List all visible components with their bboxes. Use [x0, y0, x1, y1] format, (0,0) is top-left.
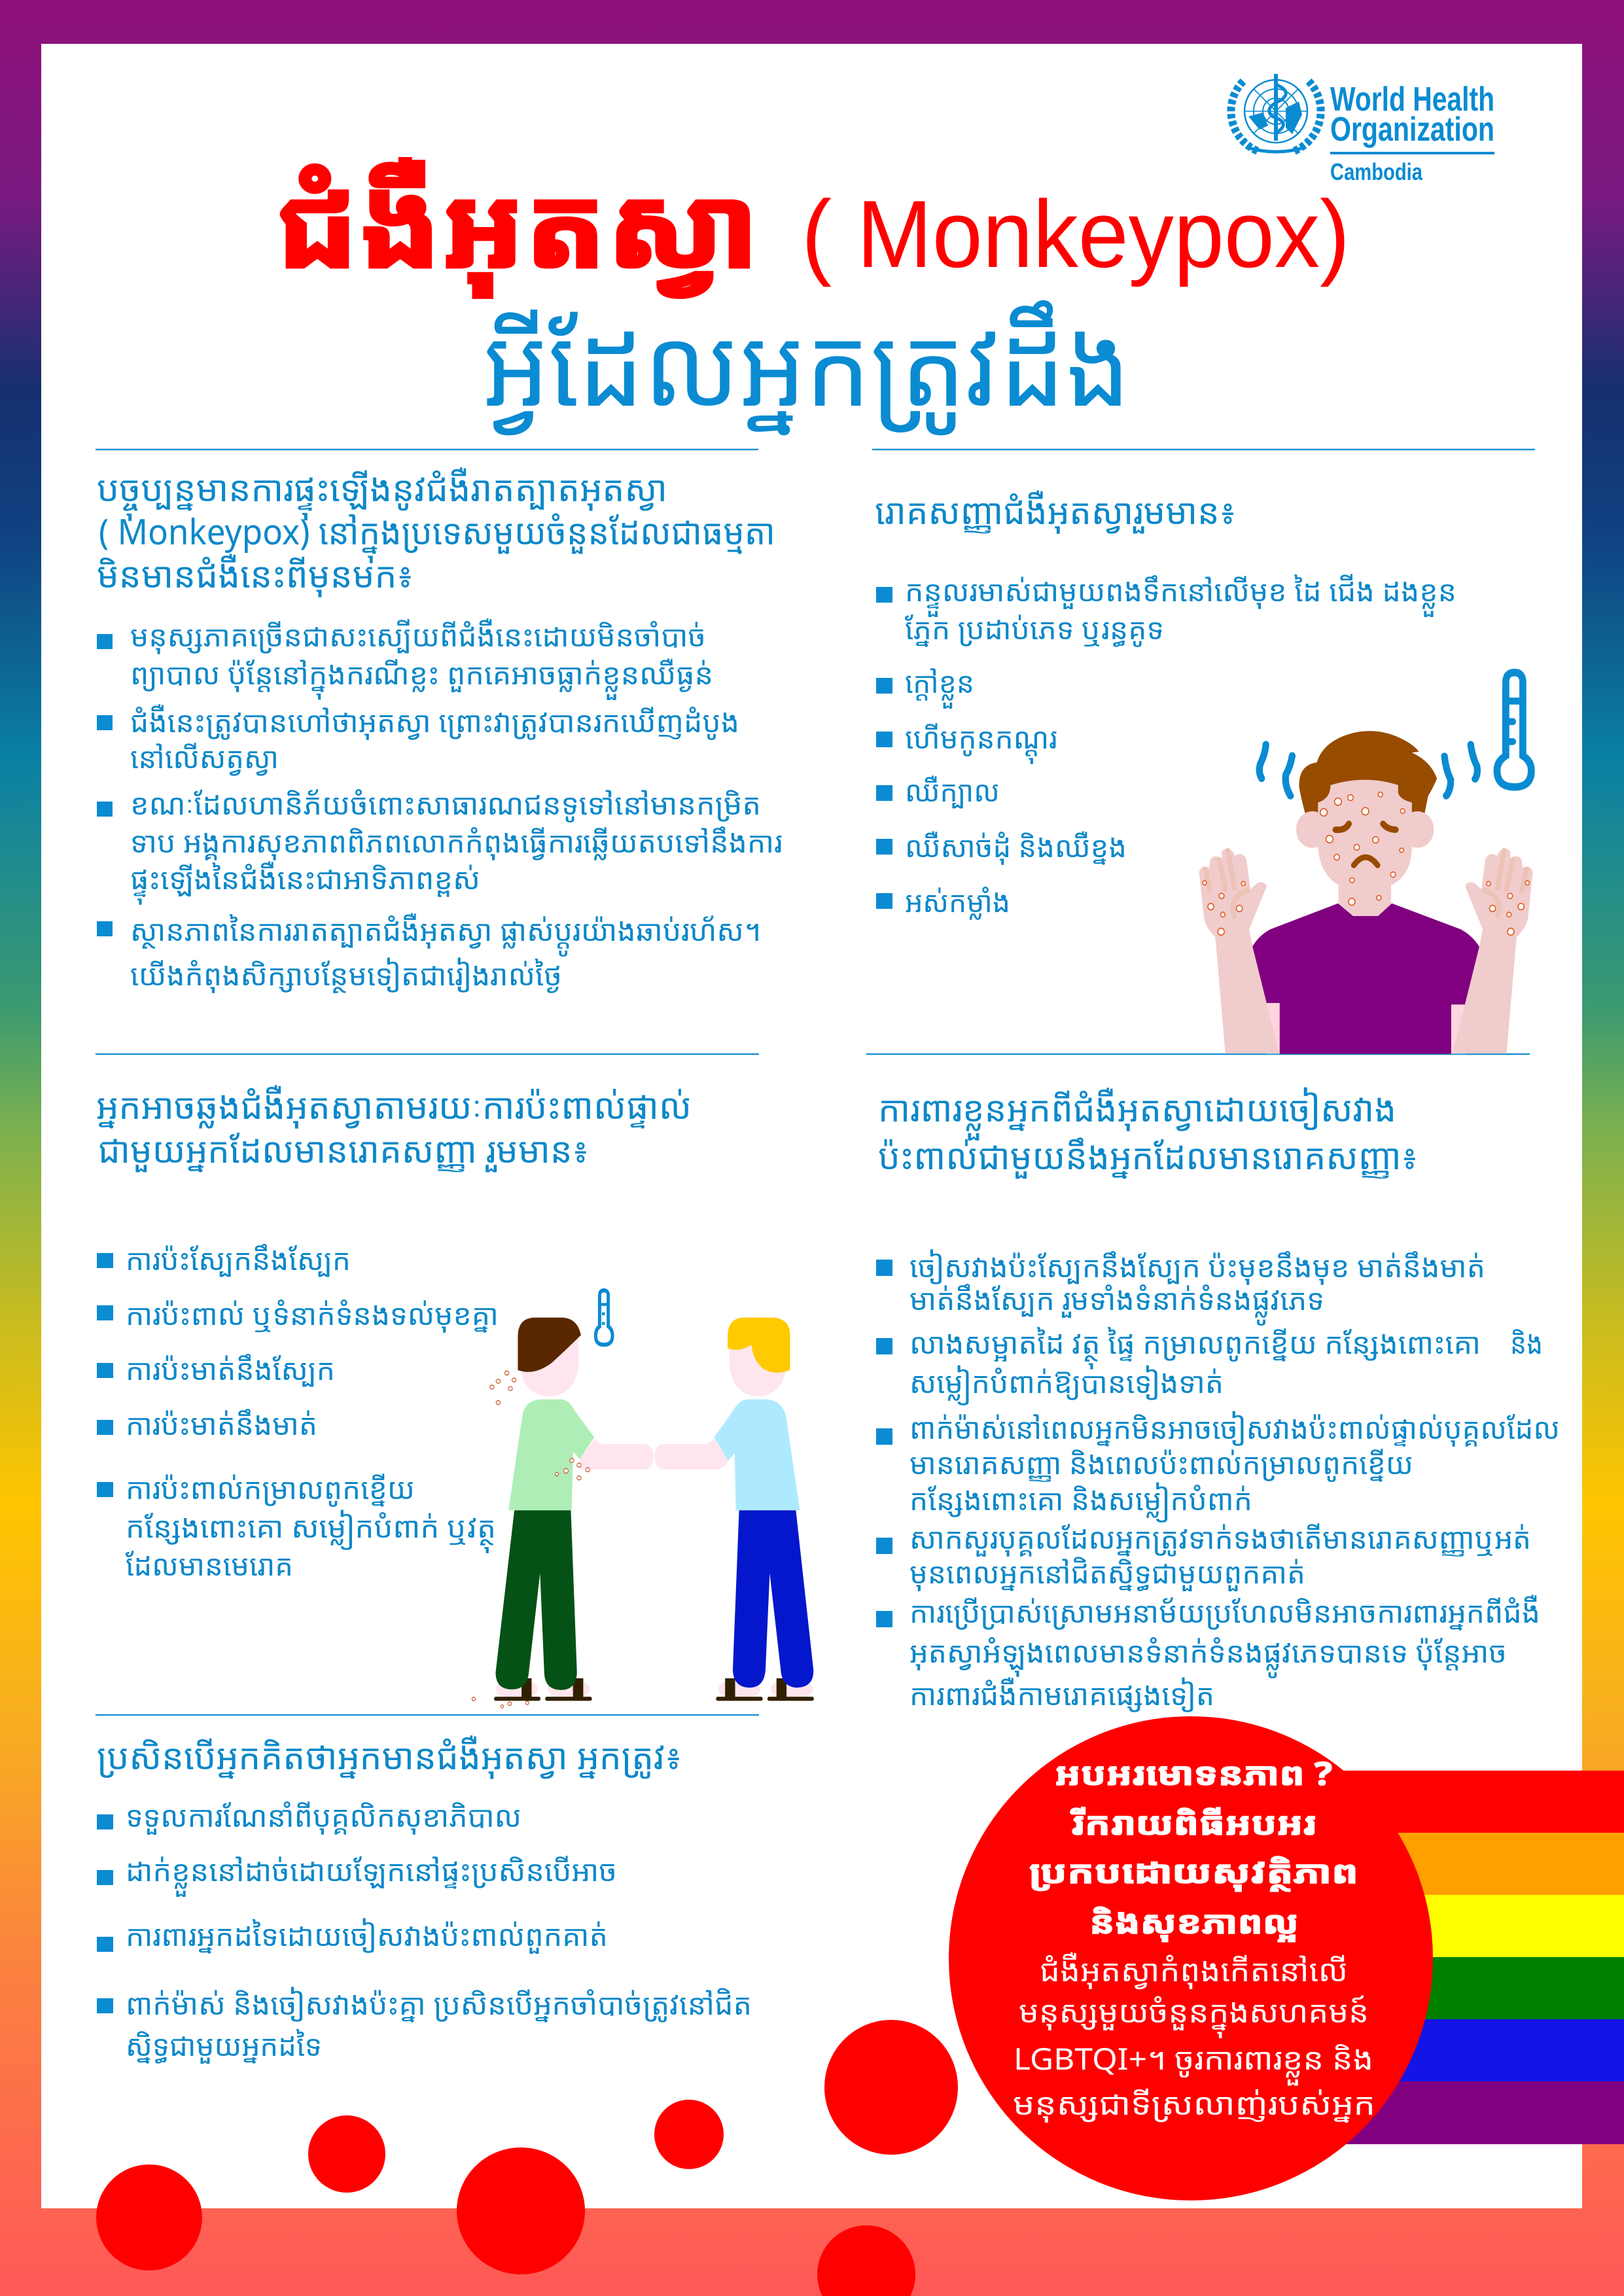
bullet: avoid skin contact: មាត់នឹងស្បែក រួមទាំងទំនាក់ទំនងផ្លូវភេទ — [909, 1279, 1324, 1326]
bullet: fever: ក្តៅខ្លួន — [905, 662, 974, 709]
bullet: ask about symptoms: មុនពេលអ្នកនៅជិតស្និទ្ធជាមួយពួកគាត់ — [909, 1553, 1305, 1592]
bullet: situation changing: យើងកំពុងសិក្សាបន្ថែមទៀតជារៀងរាល់ថ្ងៃ — [130, 955, 562, 994]
panel: symptoms — [875, 486, 1456, 921]
illustration: two people shaking hands — [472, 1290, 814, 1708]
logo wordmark: World Health — [1330, 80, 1494, 118]
panel: how it spreads — [96, 1081, 692, 1584]
person: infected — [494, 1318, 654, 1701]
rainbow flag — [1243, 1771, 1624, 2144]
bullet: avoid skin contact — [876, 1246, 1485, 1326]
callout: pride message: រីករាយពិធីអបអរ — [1070, 1802, 1316, 1845]
bullet: ask about symptoms: សាកសួរបុគ្គលដែលអ្នកត្រូវទាក់ទងថាតើមានរោគសញ្ញាឬអត់ — [909, 1518, 1531, 1557]
bullet: condoms — [876, 1592, 1540, 1714]
title: ( Monkeypox) — [802, 181, 1350, 287]
bullet: wear a mask: ពាក់ម៉ាស់ និងចៀសវាងប៉ះគ្នា ប្រសិនបើអ្នកចាំបាច់ត្រូវនៅជិត — [126, 1984, 752, 2023]
bullet: why the name — [97, 701, 739, 777]
bullet: contaminated objects: កន្សែងពោះគោ សម្លៀកបំពាក់ ឬវត្ថុ — [126, 1507, 496, 1553]
bullet: situation changing — [97, 910, 761, 994]
panel: what is happening — [97, 463, 783, 994]
callout: pride message: LGBTQI+។ ចូរការពារខ្លួន និង — [1014, 2038, 1373, 2086]
callout: pride message: មនុស្សជាទីស្រលាញ់របស់អ្នក — [1013, 2083, 1375, 2124]
bullet: fatigue: អស់កម្លាំង — [905, 881, 1010, 921]
callout: pride message: និងសុខភាពល្អ — [1089, 1901, 1299, 1943]
bullet: get advice: ទទួលការណែនាំពីបុគ្គលិកសុខាភិបាល — [126, 1796, 521, 1835]
heading — [96, 1081, 692, 1173]
callout: pride message — [949, 1716, 1433, 2200]
bullet: headache: ឈឺក្បាល — [905, 771, 1000, 810]
bullet: wear a mask: កន្សែងពោះគោ និងសម្លៀកបំពាក់ — [909, 1479, 1252, 1523]
bullet: public risk — [97, 784, 783, 905]
heading: រោគសញ្ញាជំងឺអុតស្វារួមមាន៖ — [875, 486, 1236, 535]
icon: WHO emblem — [1231, 74, 1321, 152]
logo wordmark — [1330, 80, 1494, 185]
bullet: most recover: មនុស្សភាគច្រើនជាសះស្បើយពីជំងឺនេះដោយមិនចាំបាច់ — [130, 616, 706, 655]
person: healthy — [654, 1318, 814, 1701]
bullet: clean regularly: លាងសម្អាតដៃ វត្ថុ ផ្ទៃ កម្រាលពូកខ្នើយ កន្សែងពោះគោ — [909, 1323, 1481, 1369]
callout: pride message: អបអរមោទនភាព ? — [1055, 1752, 1332, 1795]
bullet: ask about symptoms — [876, 1518, 1531, 1592]
bullet: most recover: ព្យាបាល ប៉ុន្តែនៅក្នុងករណីខ្លះ ពួកគេអាចធ្លាក់ខ្លួនឈឺធ្ងន់ — [130, 654, 713, 700]
heading: ប្រសិនបើអ្នកគិតថាអ្នកមានជំងឺអុតស្វា អ្នកត្រូវ៖ — [97, 1731, 682, 1780]
bullet: condoms: ការពារជំងឺកាមរោគផ្សេងទៀត — [909, 1674, 1214, 1714]
bullet: wear a mask: មានរោគសញ្ញា និងពេលប៉ះពាល់កម្រាលពូកខ្នើយ — [909, 1443, 1413, 1483]
bullet: muscle and back ache: ឈឺសាច់ដុំ និងឈឺខ្នង — [905, 826, 1127, 866]
heading: ការពារខ្លួនអ្នកពីជំងឺអុតស្វាដោយចៀសវាង — [878, 1084, 1396, 1140]
heading: ( Monkeypox) នៅក្នុងប្រទេសមួយចំនួនដែលជាធម្មតា — [99, 506, 775, 564]
logo wordmark: Organization — [1330, 111, 1494, 149]
heading: អ្នកអាចឆ្លងជំងឺអុតស្វាតាមរយៈការប៉ះពាល់ផ្ទាល់ — [96, 1081, 692, 1129]
callout: pride message: ប្រកបដោយសុវត្ថិភាព — [1029, 1850, 1358, 1893]
heading: ជាមួយអ្នកដែលមានរោគសញ្ញា រួមមាន៖ — [98, 1125, 589, 1173]
panel: how to protect yourself — [876, 1084, 1560, 1714]
heading: បច្ចុប្បន្នមានការផ្ទុះឡើងនូវជំងឺរាតត្បាតអុតស្វា — [97, 463, 667, 521]
bullet: most recover — [97, 616, 713, 700]
callout: pride message: មនុស្សមួយចំនួនក្នុងសហគមន៍ — [1019, 1991, 1369, 2038]
heading: ប៉ះពាល់ជាមួយនឹងអ្នកដែលមានរោគសញ្ញា៖ — [878, 1131, 1418, 1180]
bullet: clean regularly — [876, 1323, 1543, 1405]
bullet: why the name: នៅលើសត្វស្វា — [130, 737, 279, 777]
bullet: wear a mask — [97, 1984, 752, 2064]
bullet: wear a mask: ពាក់ម៉ាស់នៅពេលអ្នកមិនអាចចៀសវាងប៉ះពាល់ផ្ទាល់បុគ្គលដែល — [909, 1408, 1560, 1447]
bullet: public risk: ខណៈដែលហានិភ័យចំពោះសាធារណជនទូទៅនៅមានកម្រិត — [130, 784, 761, 823]
bullet: contaminated objects: ការប៉ះពាល់កម្រាលពូកខ្នើយ — [126, 1468, 415, 1508]
bullet: avoid skin contact: ចៀសវាងប៉ះស្បែកនឹងស្បែក ប៉ះមុខនឹងមុខ មាត់នឹងមាត់ — [909, 1246, 1485, 1286]
bullet: rash: ភ្នែក ប្រដាប់ភេទ ឬរន្ធគូទ — [905, 609, 1164, 648]
heading: មិនមានជំងឺនេះពីមុនមក៖ — [97, 550, 414, 598]
bullet: clean regularly: សម្លៀកបំពាក់ឱ្យបានទៀងទាត់ — [909, 1362, 1224, 1405]
bullet: rash: កន្ទួលរមាស់ជាមួយពងទឹកនៅលើមុខ ដៃ ជើង ដងខ្លួន — [905, 571, 1456, 617]
bullet: situation changing: ស្ថានភាពនៃការរាតត្បាតជំងឺអុតស្វា ផ្លាស់ប្តូរយ៉ាងឆាប់រហ័ស។ — [130, 910, 761, 957]
bullet: condoms: អុតស្វាអំឡុងពេលមានទំនាក់ទំនងផ្លូវភេទបានទេ ប៉ុន្តែអាច — [909, 1632, 1507, 1678]
bullet: contaminated objects: ដែលមានមេរោគ — [126, 1545, 293, 1584]
bullet: public risk: ផ្ទុះឡើងនៃជំងឺនេះជាអាទិភាពខ្ពស់ — [130, 858, 480, 905]
title: អ្វីដែលអ្នកត្រូវដឹង — [483, 289, 1131, 438]
heading — [878, 1084, 1418, 1180]
heading — [97, 463, 775, 598]
bullet: skin to skin: ការប៉ះស្បែកនឹងស្បែក — [126, 1239, 351, 1279]
logo: World Health Organization Cambodia — [1231, 74, 1494, 185]
bullet: why the name: ជំងឺនេះត្រូវបានហៅថាអុតស្វា ព្រោះវាត្រូវបានរកឃើញដំបូង — [130, 701, 739, 741]
title — [275, 147, 1350, 438]
bullet: condoms: ការប្រើប្រាស់ស្រោមអនាម័យប្រហែលមិនអាចការពារអ្នកពីជំងឺ — [909, 1592, 1540, 1631]
illustration: person with rash and fever — [1199, 673, 1533, 1054]
bullet: mouth to skin: ការប៉ះមាត់នឹងស្បែក — [126, 1349, 335, 1388]
title: ជំងឺអុតស្វា — [275, 147, 759, 300]
bullet: wear a mask — [876, 1408, 1560, 1523]
bullet: rash — [876, 571, 1456, 648]
decorative red circles — [96, 2020, 958, 2296]
icon: thermometer — [595, 1290, 612, 1345]
bullet: face to face: ការប៉ះពាល់ ឬទំនាក់ទំនងទល់មុខគ្នា — [126, 1294, 499, 1333]
bullet: fever — [876, 662, 974, 709]
bullet: isolate: ដាក់ខ្លួននៅដាច់ដោយឡែកនៅផ្ទះប្រសិនបើអាច — [126, 1850, 617, 1897]
bullet: clean regularly: និង — [1510, 1323, 1543, 1362]
logo wordmark: Cambodia — [1330, 158, 1423, 185]
bullet: protect others: ការពារអ្នកដទៃដោយចៀសវាងប៉ះពាល់ពួកគាត់ — [126, 1915, 608, 1954]
droplets — [472, 1371, 590, 1708]
callout: pride message: ជំងឺអុតស្វាកំពុងកើតនៅលើ — [1040, 1950, 1348, 1990]
bullet: mouth to mouth: ការប៉ះមាត់នឹងមាត់ — [126, 1404, 317, 1443]
bullet: wear a mask: ស្និទ្ធជាមួយអ្នកដទៃ — [126, 2025, 322, 2064]
bullet: public risk: ទាប អង្គការសុខភាពពិភពលោកកំពុងធ្វើការឆ្លើយតបទៅនឹងការ — [130, 822, 783, 861]
bullet: contaminated objects — [97, 1468, 496, 1584]
bullet: swollen lymph nodes: ហើមកូនកណ្តុរ — [905, 718, 1057, 764]
panel: if you think you have monkeypox — [97, 1731, 752, 2064]
